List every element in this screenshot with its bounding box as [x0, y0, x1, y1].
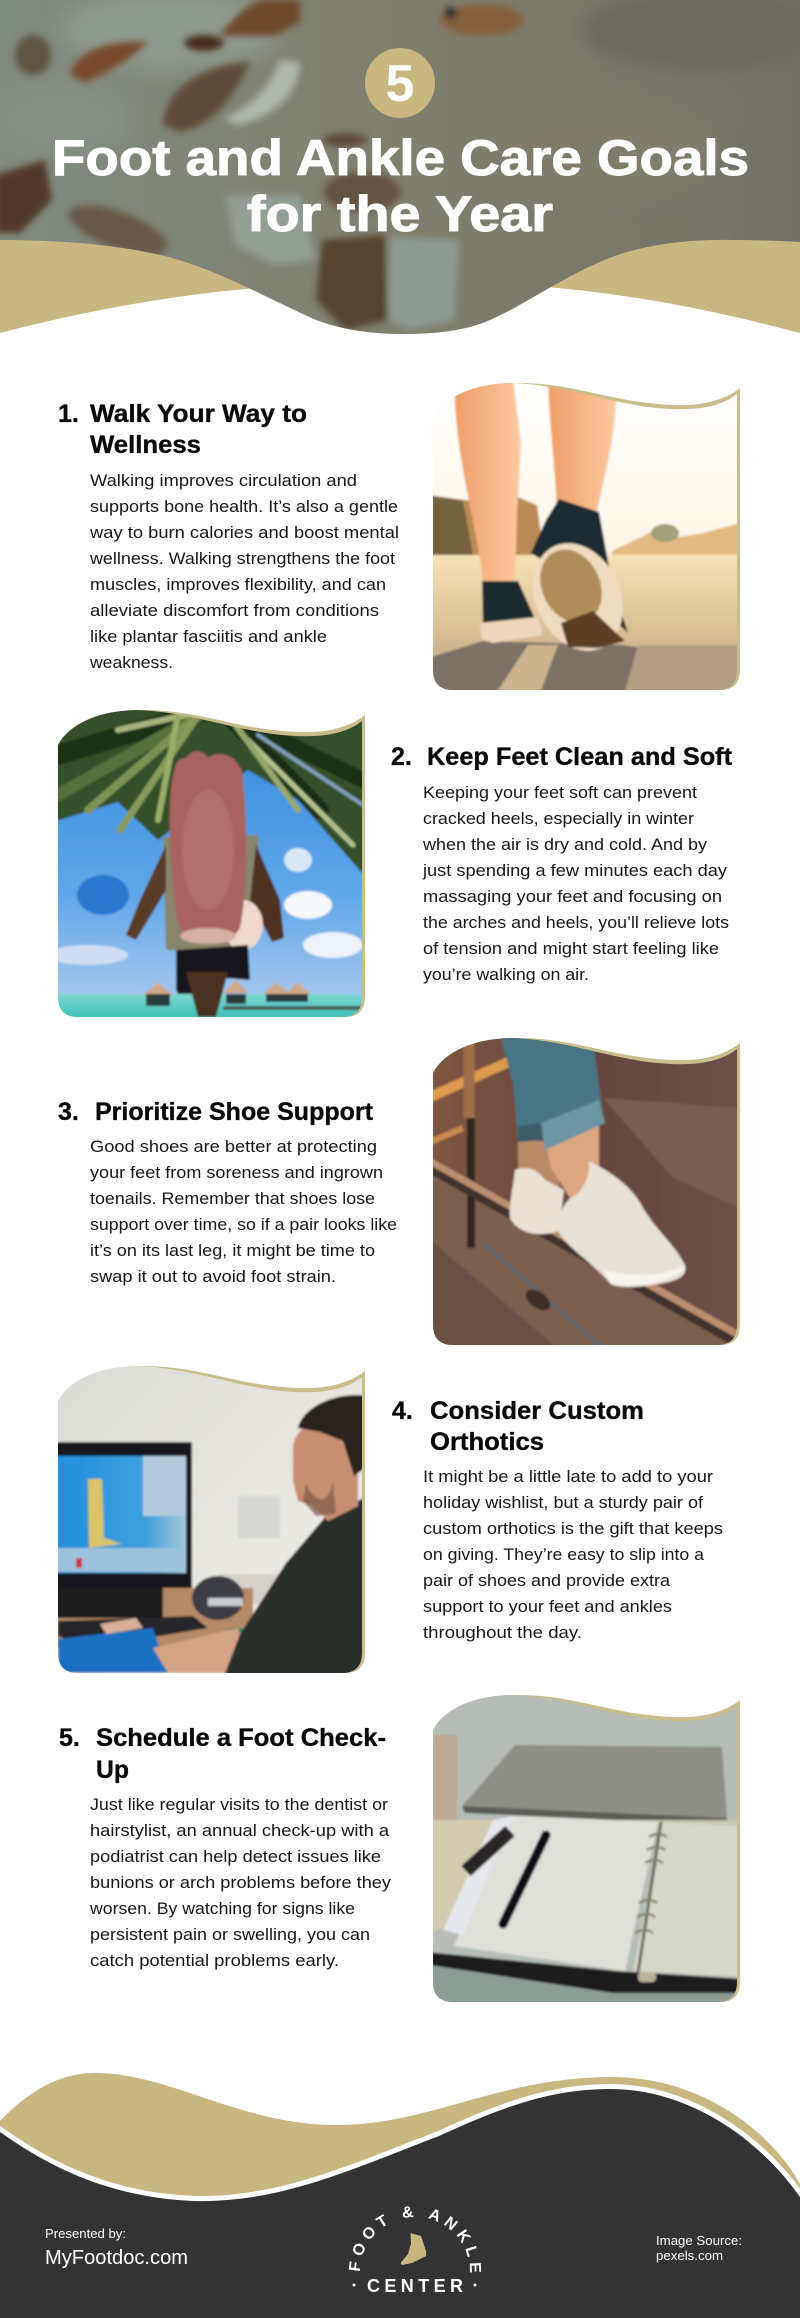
body 5: podiatrist can help detect issues like: [90, 1847, 381, 1866]
footer: tan wave: [0, 2073, 800, 2318]
heading 4: [392, 1397, 644, 1456]
photo 3: white sneakers balancing on a rail: [428, 1033, 748, 1353]
body 2: Keeping your feet soft can prevent: [423, 783, 697, 802]
body 1: supports bone health. It’s also a gentle: [90, 497, 398, 516]
badge: number 5: [365, 48, 435, 118]
body 1: muscles, improves flexibility, and can: [90, 575, 386, 594]
body 2: cracked heels, especially in winter: [423, 809, 694, 828]
logo dots: [352, 2284, 476, 2286]
heading 4: 4.: [392, 1397, 413, 1425]
body 5: bunions or arch problems before they: [90, 1873, 392, 1892]
body 3: swap it out to avoid foot strain.: [90, 1267, 336, 1286]
photo 2: foot raised against tropical sky and palm: [48, 705, 373, 1025]
heading 5: Up: [96, 1756, 129, 1784]
body 4: It might be a little late to add to your: [423, 1467, 713, 1486]
body 1: like plantar fasciitis and ankle: [90, 627, 327, 646]
heading 1: Walk Your Way to: [90, 400, 307, 428]
photo 5: planner, pen and closed laptop: [428, 1690, 748, 2010]
heading 1: 1.: [58, 400, 79, 428]
logo arc text: FOOT & ANKLE: [348, 2206, 482, 2272]
body 1: [89, 471, 399, 672]
heading 2: 2.: [391, 743, 412, 771]
footer: presented by: Presented by:: [45, 2226, 126, 2241]
body 5: persistent pain or swelling, you can: [90, 1925, 370, 1944]
heading 5: [59, 1724, 386, 1784]
body 2: of tension and might start feeling like: [423, 939, 719, 958]
title: for the Year: [247, 186, 553, 242]
body 3: [90, 1137, 397, 1286]
body 1: way to burn calories and boost mental: [89, 523, 399, 542]
heading 1: Wellness: [90, 431, 201, 459]
body 2: you’re walking on air.: [423, 965, 589, 984]
body 2: when the air is dry and cold. And by: [422, 835, 708, 854]
footer: dark panel with white edge: [0, 2089, 800, 2318]
footer: image source: Image Source:: [656, 2233, 742, 2248]
body 2: massaging your feet and focusing on: [423, 887, 722, 906]
footer: image source: [656, 2233, 742, 2263]
icon: foot: [400, 2233, 426, 2265]
body 5: hairstylist, an annual check-up with a: [90, 1821, 390, 1840]
header band: tan wave: [0, 236, 800, 333]
logo center word: CENTER: [367, 2276, 463, 2296]
body 3: toenails. Remember that shoes lose: [90, 1189, 375, 1208]
body 5: Just like regular visits to the dentist or: [90, 1795, 388, 1814]
badge: number 5: 5: [386, 55, 414, 113]
body 3: your feet from soreness and ingrown: [90, 1163, 383, 1182]
body 4: custom orthotics is the gift that keeps: [423, 1519, 723, 1538]
body 5: [89, 1795, 392, 1970]
body 5: worsen. By watching for signs like: [89, 1899, 355, 1918]
heading 2: Keep Feet Clean and Soft: [427, 743, 733, 771]
heading 5: Schedule a Foot Check-: [96, 1724, 386, 1752]
heading 4: Consider Custom: [430, 1397, 644, 1425]
body 4: holiday wishlist, but a sturdy pair of: [423, 1493, 703, 1512]
photo 4: man at monitor viewing a foot scan: [53, 1361, 373, 1681]
footer: image source: pexels.com: [656, 2248, 723, 2263]
body 2: just spending a few minutes each day: [422, 861, 728, 880]
heading 1: [58, 400, 307, 459]
body 4: pair of shoes and provide extra: [423, 1571, 671, 1590]
body 1: weakness.: [89, 653, 173, 672]
footer: logo: [348, 2206, 482, 2296]
body 2: the arches and heels, you’ll relieve lots: [423, 913, 729, 932]
title: [52, 130, 749, 242]
heading 3: 3.: [58, 1098, 79, 1126]
body 1: wellness. Walking strengthens the foot: [89, 549, 395, 568]
body 1: Walking improves circulation and: [90, 471, 357, 490]
heading 3: Prioritize Shoe Support: [95, 1098, 374, 1126]
footer: presented by: [45, 2226, 188, 2269]
body 3: support over time, so if a pair looks like: [90, 1215, 397, 1234]
section 5: text: [59, 1724, 392, 1970]
title: Foot and Ankle Care Goals: [52, 130, 749, 186]
heading 4: Orthotics: [430, 1428, 544, 1456]
footer: presented by: MyFootdoc.com: [45, 2247, 188, 2269]
body 4: throughout the day.: [423, 1623, 582, 1642]
section 2: text: [391, 743, 733, 984]
photo 1: walking legs on a sunny road: [428, 378, 748, 698]
body 5: catch potential problems early.: [90, 1951, 339, 1970]
header photo: footprints in sand: [0, 0, 800, 340]
heading 5: 5.: [59, 1724, 80, 1752]
section 3: text: [58, 1098, 397, 1286]
body 4: support to your feet and ankles: [423, 1597, 672, 1616]
section 4: text: [392, 1397, 723, 1642]
body 4: [423, 1467, 723, 1642]
body 3: it’s on its last leg, it might be time to: [90, 1241, 375, 1260]
section 1: text: [58, 400, 399, 672]
body 1: alleviate discomfort from conditions: [90, 601, 379, 620]
body 4: on giving. They’re easy to slip into a: [423, 1545, 705, 1564]
body 3: Good shoes are better at protecting: [90, 1137, 377, 1156]
body 2: [422, 783, 729, 984]
